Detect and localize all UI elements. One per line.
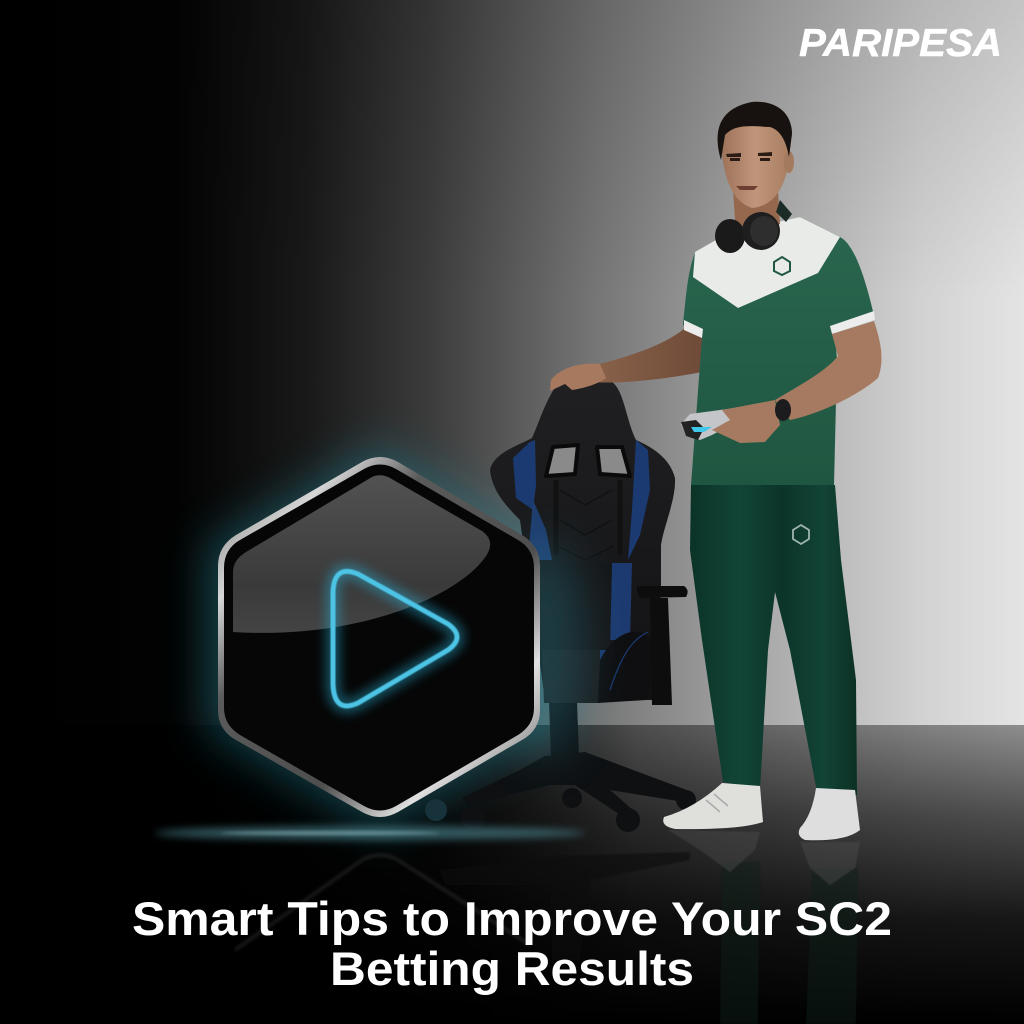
cyan glow behind badge (208, 445, 550, 830)
badge gloss highlight (233, 475, 490, 633)
trouser logo (793, 525, 809, 544)
game controller (681, 408, 740, 440)
left shoe (663, 783, 763, 829)
left arm to chair (590, 328, 702, 383)
face details (726, 152, 772, 190)
player (550, 102, 881, 840)
neon play icon (333, 571, 457, 706)
wristwatch (775, 399, 791, 421)
ear (784, 151, 794, 173)
teal glow over chair (505, 540, 585, 760)
hair (718, 102, 792, 160)
hexagon play badge (218, 457, 540, 817)
chair blue stripes (513, 440, 650, 664)
right shoe (799, 788, 860, 840)
floor reflections (440, 830, 860, 1024)
reflection: player legs (720, 862, 858, 1024)
right arm (775, 321, 881, 420)
reflection: hexagon badge (235, 855, 530, 950)
title: Smart Tips to Improve Your SC2 (132, 892, 892, 945)
chair backrest (490, 379, 675, 700)
trousers (690, 485, 857, 795)
headphones (715, 200, 792, 253)
title (132, 892, 892, 995)
gaming chair (425, 379, 696, 832)
shirt cuffs (684, 311, 875, 338)
shirt white yoke (693, 217, 840, 308)
reflection: shoes (668, 830, 860, 885)
head (720, 125, 790, 208)
chair headrest slots (546, 445, 630, 476)
hand on controller (712, 400, 780, 443)
left hand on chair (550, 364, 606, 391)
badge chrome frame (218, 457, 540, 817)
chair base (425, 702, 696, 832)
reflection: chair base (440, 852, 690, 960)
shirt (683, 217, 875, 485)
chair armrest (637, 586, 688, 705)
badge black face (224, 464, 534, 810)
shirt logo (774, 257, 790, 275)
chair lumbar and seat (542, 563, 653, 703)
chair back chevrons (556, 480, 620, 560)
reflective floor (0, 725, 1024, 1024)
title: Betting Results (330, 942, 694, 995)
brand logo: PARIPESA (799, 22, 1002, 65)
light streak on floor (155, 826, 585, 840)
neck (733, 190, 780, 240)
